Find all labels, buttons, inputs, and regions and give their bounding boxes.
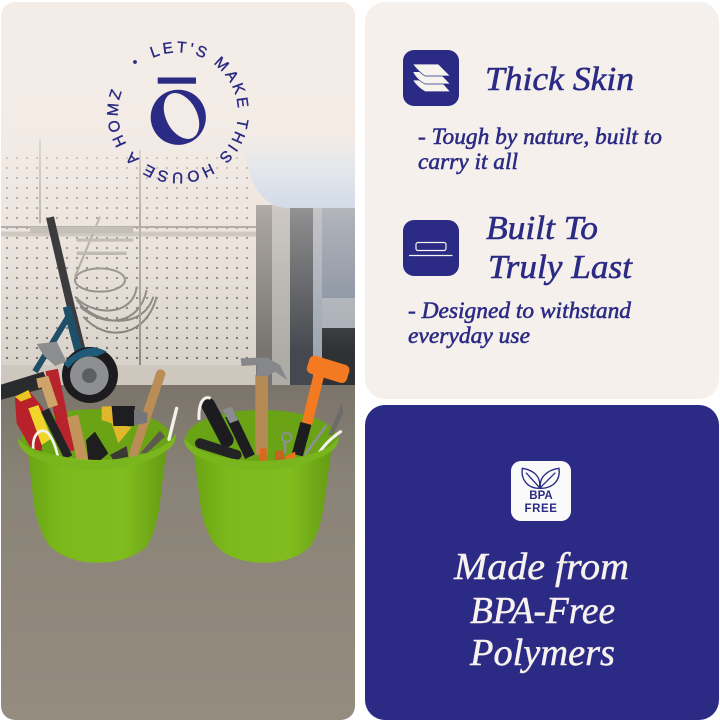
heading: Thick Skin: Thick Skin — [485, 61, 634, 98]
left bucket rim — [18, 434, 176, 462]
top fade overlay — [1, 140, 355, 338]
heading: Built To Truly Last: Built To — [486, 210, 598, 247]
garage floor — [1, 385, 355, 720]
logo ring — [151, 90, 206, 145]
pegboard holes — [0, 150, 262, 365]
text: tough by nature: carry it all — [418, 149, 518, 174]
panel: BPA free — [365, 405, 719, 720]
baseboard — [1, 365, 256, 387]
icon: BPA free badge — [511, 461, 571, 521]
separator dot — [133, 60, 137, 64]
right bucket rim — [184, 436, 339, 462]
heading: Made from BPA-Free Polymers: Made from — [453, 546, 629, 588]
metal shelving — [256, 205, 355, 390]
heading: Made from BPA-Free Polymers: Polymers — [469, 632, 615, 674]
panel: product features — [365, 2, 719, 399]
heading: Made from BPA-Free Polymers: BPA-Free — [470, 590, 615, 632]
icon: BPA free badge: BPA — [529, 490, 553, 502]
garage wall — [1, 143, 274, 365]
buckets and tools — [15, 342, 351, 563]
feature icon: durable base — [403, 220, 459, 276]
logo macron — [158, 78, 196, 84]
logo ring opening — [157, 87, 206, 145]
scooter — [0, 217, 118, 403]
left bucket tools — [15, 342, 177, 461]
right bucket tools — [199, 354, 351, 462]
right bucket body — [193, 448, 332, 563]
blue storage bin on wall — [246, 156, 355, 208]
right bucket interior — [186, 410, 338, 467]
feature icon: layers — [403, 50, 459, 106]
panel: garage photo with buckets — [0, 2, 355, 720]
hanging hoses and pipes — [30, 140, 157, 350]
circular tagline: LET'S MAKE THIS HOUSE A HOMZ — [106, 41, 249, 184]
text: designed to withstand: everyday use — [408, 323, 530, 348]
text: designed to withstand: - Designed to withstand — [408, 298, 631, 323]
icon: BPA free badge: FREE — [524, 503, 558, 515]
left bucket interior — [22, 409, 172, 460]
heading: Built To Truly Last: Truly Last — [488, 249, 634, 286]
left bucket body — [27, 447, 167, 563]
logo badge — [106, 41, 249, 184]
text: tough by nature: - Tough by nature, built to — [418, 124, 662, 149]
